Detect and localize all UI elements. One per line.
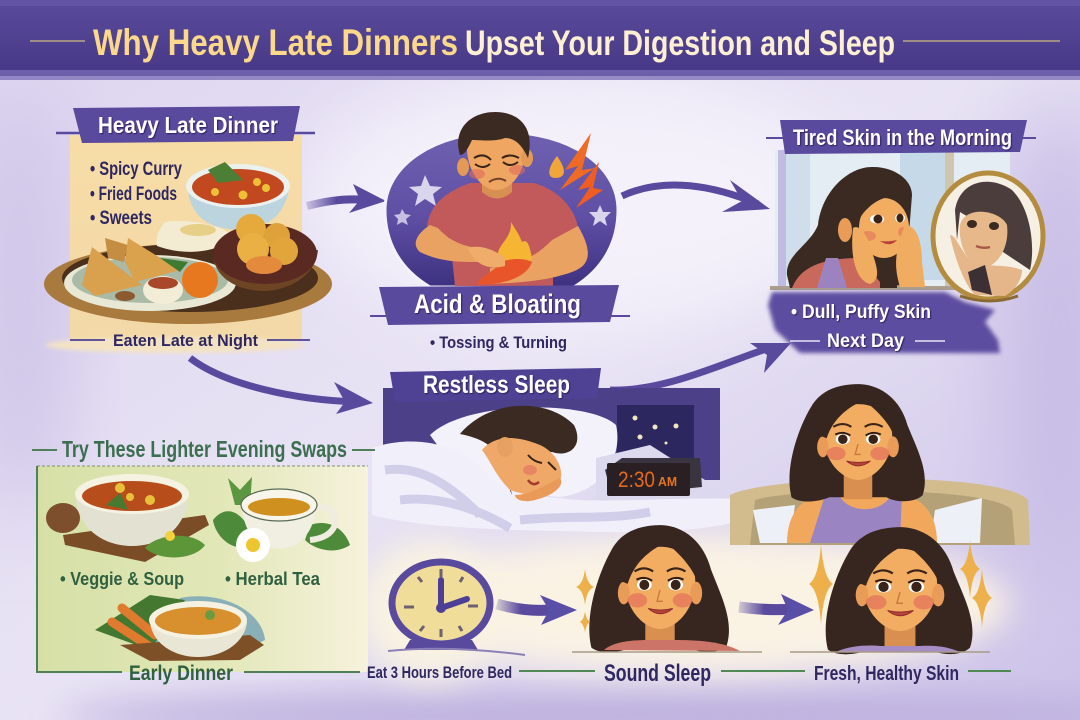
icon: pain bolts bbox=[549, 133, 603, 208]
text: herbal tea: • Herbal Tea bbox=[225, 569, 321, 589]
icon: bowl of fried balls bbox=[213, 214, 318, 291]
arrow: acid to tired skin bbox=[622, 180, 770, 212]
arrow: dinner to acid bbox=[307, 184, 386, 213]
icon: herbal tea cup bbox=[213, 477, 350, 562]
figure: fresh healthy skin woman bbox=[790, 527, 992, 654]
label: dull puffy skin: • Dull, Puffy Skin bbox=[791, 302, 931, 323]
food list: • Fried Foods bbox=[90, 184, 177, 205]
heading: heavy late dinner bbox=[56, 106, 315, 143]
headboard bbox=[383, 388, 720, 480]
heading: tired skin: Tired Skin in the Morning bbox=[793, 125, 1012, 150]
caption: fresh healthy skin: Fresh, Healthy Skin bbox=[814, 663, 959, 685]
heading: heavy late dinner: Heavy Late Dinner bbox=[98, 112, 278, 138]
icon: early dinner soup bbox=[95, 595, 265, 661]
figure: woman at mirror bbox=[787, 167, 925, 288]
icon: alarm clock bbox=[605, 458, 702, 496]
icon: stomach flame bbox=[498, 222, 532, 266]
window bbox=[770, 150, 1010, 290]
footer captions bbox=[367, 660, 1011, 687]
icon: oval mirror bbox=[933, 173, 1043, 301]
panel: heavy late dinner bbox=[44, 106, 332, 353]
caption: eat 3 hours before bed: Eat 3 Hours Before Bed bbox=[367, 663, 512, 682]
text: early dinner: Early Dinner bbox=[129, 662, 233, 685]
panel: acid and bloating bbox=[370, 112, 630, 352]
panel: lighter evening swaps bbox=[32, 436, 375, 685]
caption: sound sleep: Sound Sleep bbox=[604, 660, 711, 687]
label: dull puffy skin bbox=[768, 292, 1000, 353]
title text second part: Upset Your Digestion and Sleep bbox=[465, 24, 895, 63]
icon: thali plate with samosas bbox=[44, 221, 332, 324]
arrow: dinner to restless sleep bbox=[190, 358, 373, 414]
text: veggie and soup: • Veggie & Soup bbox=[60, 569, 184, 589]
label: dull puffy skin: Next Day bbox=[827, 331, 904, 352]
arrow: restless sleep to tired skin bbox=[610, 343, 791, 390]
icon: alarm clock: 2:30 bbox=[618, 467, 655, 492]
icon: veggie soup bowl bbox=[46, 474, 209, 562]
heading: lighter swaps: Try These Lighter Evening Swaps bbox=[62, 436, 347, 462]
figure: woman waking refreshed in bed bbox=[730, 384, 1030, 545]
icon: sparkles left bbox=[576, 569, 594, 633]
bedding bbox=[372, 407, 772, 532]
icon: alarm clock: AM bbox=[658, 474, 677, 489]
food list: • Spicy Curry bbox=[90, 159, 182, 180]
arrow: sound sleep to fresh skin bbox=[739, 594, 814, 625]
swaps panel background bbox=[37, 466, 368, 672]
heading: restless sleep: Restless Sleep bbox=[423, 371, 570, 399]
heading: acid and bloating bbox=[370, 285, 630, 325]
panel: tired skin in the morning bbox=[766, 120, 1043, 353]
food list bbox=[90, 159, 182, 229]
title banner bbox=[0, 0, 1080, 80]
figure: sound sleep woman bbox=[572, 525, 762, 652]
heading: acid and bloating: Acid & Bloating bbox=[414, 289, 581, 319]
icon: curry bowl bbox=[186, 162, 290, 230]
title text: Why Heavy Late Dinners bbox=[93, 22, 458, 63]
arrow: clock to sound sleep bbox=[497, 595, 577, 625]
night circle bbox=[385, 132, 618, 287]
food list: • Sweets bbox=[90, 208, 152, 229]
text: tossing and turning: • Tossing & Turning bbox=[430, 333, 567, 352]
caption: eaten late at night: Eaten Late at Night bbox=[113, 331, 258, 350]
figure: restless sleeper bbox=[460, 406, 577, 501]
heading: tired skin bbox=[766, 120, 1036, 154]
icon: sparkles right bbox=[809, 540, 992, 627]
panel: restless sleep bbox=[372, 368, 772, 532]
heading: restless sleep bbox=[390, 368, 601, 402]
icon: clock bbox=[388, 562, 525, 655]
figure: boy holding stomach bbox=[416, 112, 588, 286]
